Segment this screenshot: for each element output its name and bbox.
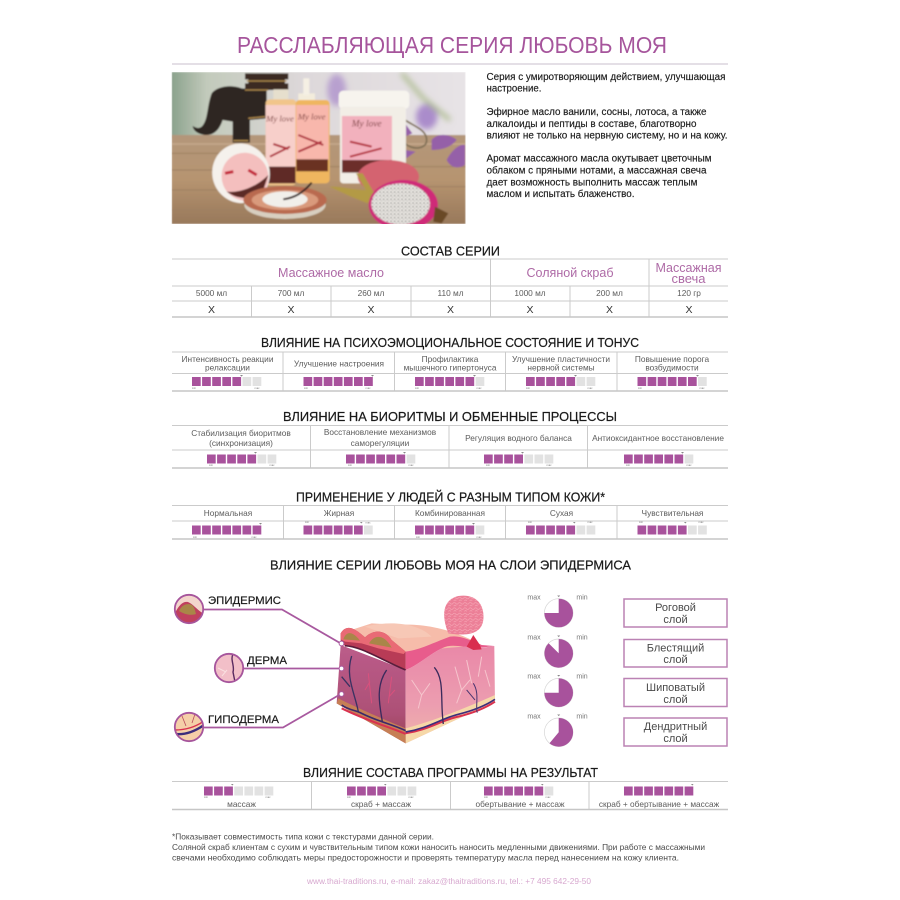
rating bars: max [266,796,271,799]
row labels: Улучшение настроения [294,358,384,368]
program labels: скраб + массаж [351,799,411,809]
volumes: 200 мл [596,288,623,298]
heading: composition: СОСТАВ СЕРИИ [401,244,500,258]
rating bars: min [304,386,309,390]
pie gauge: stratum corneum: max [527,594,541,602]
availability marks: X [287,304,295,316]
title: РАССЛАБЛЯЮЩАЯ СЕРИЯ ЛЮБОВЬ МОЯ [237,32,667,58]
row labels [191,427,724,448]
skin cross-section illustration [337,596,495,743]
pie gauge: stratum lucidum: min [576,634,588,642]
rating bars [192,520,708,539]
rating bars: max [588,387,593,390]
intro text: алкалоиды и пептиды в составе, благотворно [486,119,696,130]
intro text: настроение. [486,84,542,95]
product group names: Массажная [656,260,722,275]
connector: epidermis [204,610,340,643]
rating bars: min [305,520,310,524]
row labels [182,354,709,372]
row labels: возбудимости [645,362,699,372]
rating bars: min [415,386,420,390]
panel: composition table [172,244,728,317]
connector: dermis [244,668,340,670]
heading: program results: ВЛИЯНИЕ СОСТАВА ПРОГРАММЫ НА РЕЗУЛЬТАТ [303,765,598,780]
rating bars: max [366,522,371,524]
heading: skin types: ПРИМЕНЕНИЕ У ЛЮДЕЙ С РАЗНЫМ ТИПОМ КОЖИ* [296,490,605,504]
rating bars: min [347,795,352,799]
pie gauge: stratum lucidum: max [527,634,541,642]
layer box: spinous: Шиповатый [646,682,705,694]
rating bars: min [528,520,533,524]
product photo: My love [297,111,326,121]
row labels: Сухая [550,508,573,518]
volumes: 700 мл [278,288,305,298]
volumes: 120 гр [677,288,701,298]
rating bars: min [626,463,631,467]
rating bars: min [416,535,421,539]
volumes [196,288,701,298]
layer box: lucid [624,640,727,667]
callout: hypodermis: ГИПОДЕРМА [208,714,280,726]
rating bars [204,784,695,799]
row labels: Комбинированная [415,508,485,518]
layer box: lucid: слой [663,654,688,666]
intro text: облаком с пряными нотами, а массажная свеча [486,166,707,177]
pie gauge: stratum corneum [527,594,588,627]
row labels: мышечного гипертонуса [404,362,497,372]
rating bars: max [409,464,414,467]
pie gauge: stratum dendriticum [527,714,588,747]
rating bars [192,375,708,390]
availability marks: X [526,304,534,316]
rating bars: max [255,387,260,390]
layer box: horny [624,599,727,627]
layer box: horny: Роговой [655,602,696,614]
rating bars: min [192,386,197,390]
panel: program results [172,765,728,810]
row labels: Антиоксидантное восстановление [592,433,724,443]
row labels: Профилактика [422,354,479,364]
rating bars: max [477,536,482,539]
thumbnail: hypodermis [174,712,204,742]
rating bars [207,452,694,467]
product group names: Массажное масло [278,265,384,280]
heading: epidermis layers: ВЛИЯНИЕ СЕРИИ ЛЮБОВЬ МОЯ НА СЛОИ ЭПИДЕРМИСА [270,558,631,572]
rating bars: max [546,796,551,799]
footnote: свечами необходимо соблюдать меры предосторожности и проверять температуру масла перед нанесением на кожу клиента. [172,854,679,862]
row labels: Стабилизация биоритмов [191,428,291,438]
pie gauge: stratum dendriticum: max [527,714,541,720]
intro text: маслом и испытать блаженство. [486,189,634,200]
program labels: массаж [227,799,256,809]
row labels: Нормальная [204,508,252,518]
heading: psycho-emotional: ВЛИЯНИЕ НА ПСИХОЭМОЦИОНАЛЬНОЕ СОСТОЯНИЕ И ТОНУС [261,335,639,350]
rating bars: min [193,535,198,539]
callout: dermis: ДЕРМА [247,655,288,667]
rating bars: min [348,463,353,467]
product group names: Соляной скраб [526,265,614,280]
intro text: Серия с умиротворяющим действием, улучшающая [486,72,726,83]
rating bars: min [484,795,489,799]
panel: biorhythms [172,409,728,468]
rating bars: min [639,520,644,524]
rating bars: min [526,386,531,390]
row labels: Чувствительная [642,508,703,518]
footnote [172,832,705,862]
pie gauge: stratum dendriticum: min [576,714,588,720]
program labels: обертывание + массаж [475,799,565,809]
connector: hypodermis [204,694,340,728]
callout: epidermis [174,594,344,646]
rating bars: max [687,464,692,467]
pie gauge: stratum corneum: min [576,594,588,602]
callout: epidermis: ЭПИДЕРМИС [208,595,281,607]
intro text: Эфирное масло ванили, сосны, лотоса, а также [486,107,706,118]
program labels [227,799,720,809]
availability marks: X [685,304,693,316]
intro text: влияют не только на нервную систему, но и на кожу. [486,130,728,142]
layer box: spinous: слой [663,694,688,706]
layer box: dendritic: Дендритный [644,721,707,733]
rating bars: max [588,521,593,524]
availability marks: X [367,304,375,316]
callout: hypodermis [174,692,344,742]
rating bars: max [700,387,705,390]
thumbnail: epidermis [174,594,204,624]
panel: skin types [172,490,728,539]
availability marks [208,304,693,316]
rating bars: min [204,795,209,799]
layer box: lucid: Блестящий [647,642,704,654]
row labels [204,508,703,518]
footnote: *Показывает совместимость типа кожи с текстурами данной серии. [172,832,434,842]
panel: psycho-emotional [172,335,728,391]
pie gauge: stratum lucidum [527,634,588,668]
volumes: 1000 мл [514,288,546,298]
footnote: Соляной скраб клиентам с сухим и чувствительным типом кожи наносить наносить медленными движениями. При работе с массажными [172,843,705,852]
availability marks: X [208,304,215,316]
row labels: релаксации [205,362,250,372]
row labels: Улучшение пластичности [512,354,610,364]
row labels: (синхронизация) [209,438,273,448]
availability marks: X [447,304,454,316]
intro text [486,72,728,200]
thumbnail: dermis [214,653,244,683]
rating bars: max [270,464,275,467]
layer box: horny: слой [663,614,688,626]
rating bars: max [547,464,552,467]
row labels: Повышение порога [635,354,709,364]
intro text: Аромат массажного масла окутывает цветочным [486,154,712,165]
layer box: dendritic [624,718,727,746]
program labels: скраб + обертывание + массаж [599,799,720,809]
rating bars: max [366,387,371,390]
volumes: 110 мл [437,288,464,298]
row labels: Регуляция водного баланса [465,433,572,443]
rating bars: max [477,387,482,390]
availability marks: X [606,304,613,316]
pie gauge: stratum spinosum [527,674,588,707]
product photo: My love [265,114,294,124]
row labels: саморегуляции [351,438,410,448]
product group names [278,260,722,286]
row labels: Интенсивность реакции [182,354,274,364]
callout: dermis [214,653,344,683]
rating bars: min [209,463,214,467]
rating bars: min [486,463,491,467]
product photo: My love [351,120,382,130]
rating bars: min [638,386,643,390]
rating bars: max [409,796,414,799]
product photo [172,72,466,230]
product group names: свеча [672,271,706,286]
rating bars: max [252,536,257,539]
pie gauge: stratum spinosum: max [527,674,541,680]
volumes: 5000 мл [196,288,227,298]
pie gauge: stratum spinosum: min [576,674,588,680]
row labels: нервной системы [527,362,595,372]
volumes: 260 мл [358,288,385,298]
intro text: дает возможность выполнить массаж теплым [486,177,698,188]
footer contacts: www.thai-traditions.ru, e-mail: zakaz@thaitraditions.ru, tel.: +7 495 642-29-50 [306,876,591,886]
row labels: Восстановление механизмов [324,427,437,437]
layer box: dendritic: слой [663,733,688,745]
row labels: Жирная [324,508,354,518]
layer box: spinous [624,678,727,706]
rating bars: max [699,521,704,524]
heading: biorhythms: ВЛИЯНИЕ НА БИОРИТМЫ И ОБМЕННЫЕ ПРОЦЕССЫ [283,409,617,424]
